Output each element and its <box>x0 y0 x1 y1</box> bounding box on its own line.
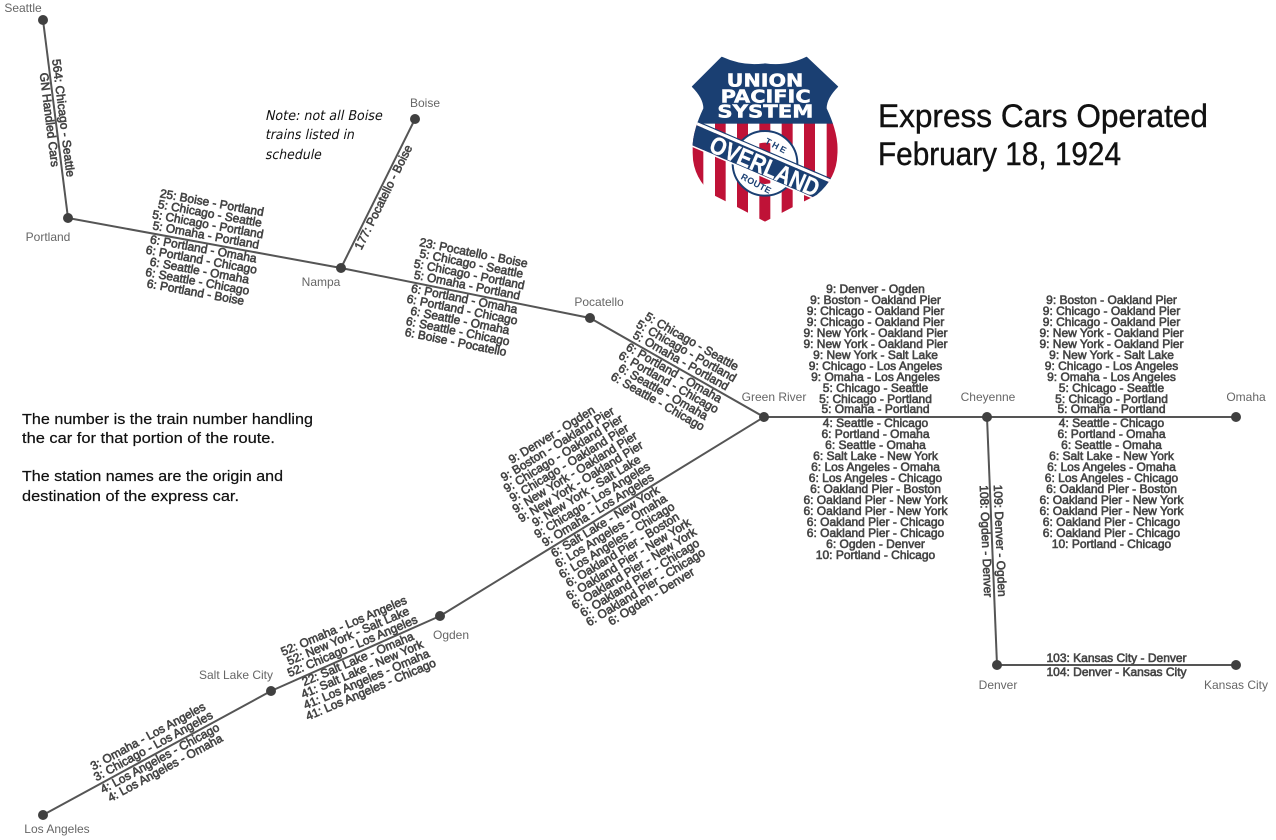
train labels: Cheyenne to Omaha: 9: Boston - Oakland Pier <box>1046 293 1177 307</box>
logo: The Route lettering <box>739 136 788 196</box>
note about Boise trains <box>264 108 385 163</box>
logo: Union Pacific shield: PACIFIC <box>721 86 811 107</box>
train labels: Green River to Ogden: 6: Los Angeles - Chicago <box>556 499 677 581</box>
train labels: Green River to Cheyenne: 9: New York - Oakland Pier <box>803 326 948 340</box>
train labels: Cheyenne to Omaha: 4: Seattle - Chicago <box>1059 416 1165 430</box>
train labels: Nampa to Pocatello <box>399 235 531 360</box>
train labels: Nampa to Pocatello: 6: Portland - Omaha <box>410 281 519 316</box>
station names: Kansas City <box>1204 678 1268 692</box>
train labels: Salt Lake City to Los Angeles: 3: Chicago - Los Angeles <box>91 708 215 784</box>
logo: Union Pacific shield: SYSTEM <box>717 101 813 122</box>
train labels: Green River to Cheyenne: 6: Oakland Pier - Boston <box>810 482 941 496</box>
train labels: Cheyenne to Omaha: 9: Chicago - Oakland Pier <box>1043 304 1180 318</box>
train labels: Cheyenne to Omaha: 9: Chicago - Los Angeles <box>1045 359 1178 373</box>
train labels: Green River to Cheyenne: 6: Oakland Pier - New York <box>803 493 949 507</box>
train labels: Ogden to Salt Lake City: 41: Salt Lake - New York <box>299 637 426 701</box>
train labels: Cheyenne to Denver: 109: Denver - Ogden <box>991 484 1009 597</box>
train labels: Portland to Nampa: 25: Boise - Portland <box>159 186 265 219</box>
train labels: Green River to Cheyenne: 6: Ogden - Denver <box>826 537 925 551</box>
station names: Green River <box>742 390 806 404</box>
train labels: Nampa to Pocatello: 6: Boise - Pocatello <box>404 325 508 359</box>
train labels: Cheyenne to Omaha: 9: Chicago - Oakland Pier <box>1043 315 1180 329</box>
train labels: Cheyenne to Omaha: 9: New York - Oakland Pier <box>1039 326 1184 340</box>
train labels: Portland to Nampa: 6: Portland - Chicago <box>145 243 258 277</box>
train labels: Green River to Ogden: 6: Salt Lake - New York <box>548 482 663 560</box>
train labels: Cheyenne to Omaha: 5: Chicago - Portland <box>1055 392 1168 406</box>
train labels: Salt Lake City to Los Angeles <box>86 698 227 806</box>
train labels: Cheyenne to Omaha <box>1039 293 1185 551</box>
note about Boise trains: trains listed in <box>264 127 357 143</box>
train labels: Cheyenne to Omaha: 9: New York - Oakland Pier <box>1039 337 1184 351</box>
train labels: Cheyenne to Omaha: 6: Salt Lake - New York <box>1049 449 1175 463</box>
station names: Nampa <box>302 275 341 289</box>
train labels: Green River to Cheyenne: 6: Seattle - Omaha <box>825 438 926 452</box>
train labels: Salt Lake City to Los Angeles: 3: Omaha - Los Angeles <box>88 699 208 773</box>
train labels: Pocatello to Green River <box>605 307 745 435</box>
train labels: Green River to Cheyenne: 6: Oakland Pier - Chicago <box>807 526 945 540</box>
title: February 18, 1924 <box>878 136 1121 172</box>
train labels: Cheyenne to Omaha: 6: Oakland Pier - Boston <box>1046 482 1177 496</box>
explanatory text: the car for that portion of the route. <box>22 430 275 447</box>
train labels: Ogden to Salt Lake City: 41: Los Angeles - Chicago <box>304 655 438 723</box>
station names: Salt Lake City <box>199 668 273 682</box>
train labels: Ogden to Salt Lake City: 52: New York - Salt Lake <box>285 604 412 668</box>
explanatory text: The station names are the origin and <box>22 468 283 485</box>
train labels: Nampa to Pocatello: 6: Seattle - Omaha <box>409 304 511 337</box>
explanatory text <box>22 411 313 505</box>
logo: Union Pacific shield: UNION <box>727 71 803 92</box>
train labels: Nampa to Pocatello: 6: Seattle - Chicago <box>405 314 511 349</box>
train labels: Nampa to Pocatello: 6: Portland - Chicago <box>406 292 519 328</box>
train labels: Green River to Cheyenne: 9: Boston - Oakland Pier <box>810 293 941 307</box>
title <box>878 98 1208 172</box>
train labels: Portland to Nampa: 5: Chicago - Seattle <box>157 197 263 230</box>
train labels: Pocatello to Green River: 6: Seattle - Chicago <box>608 369 707 434</box>
train labels: Green River to Cheyenne: 5: Chicago - Seattle <box>823 381 929 395</box>
train labels: Green River to Ogden: 6: Oakland Pier - Chicago <box>578 536 702 620</box>
station names: Portland <box>26 230 70 244</box>
train labels: Green River to Ogden: 9: Boston - Oakland Pier <box>498 404 617 484</box>
train labels: Green River to Ogden: 6: Oakland Pier - Boston <box>563 510 682 590</box>
train labels: Green River to Cheyenne: 6: Portland - Omaha <box>821 427 930 441</box>
train labels: Portland to Nampa: 6: Seattle - Omaha <box>149 255 251 287</box>
train labels: Green River to Cheyenne: 9: New York - Oakland Pier <box>803 337 948 351</box>
station names: Boise <box>410 96 440 110</box>
train labels: Cheyenne to Omaha: 6: Oakland Pier - New York <box>1039 504 1185 518</box>
train labels: Denver to Kansas City <box>1046 651 1187 679</box>
train labels: Cheyenne to Omaha: 6: Oakland Pier - Chicago <box>1043 526 1181 540</box>
train labels: Green River to Cheyenne: 6: Oakland Pier - New York <box>803 504 949 518</box>
train labels: Portland to Nampa <box>139 186 269 309</box>
train labels: Cheyenne to Omaha: 9: New York - Salt Lake <box>1049 348 1174 362</box>
train labels: Cheyenne to Omaha: 6: Los Angeles - Omaha <box>1047 460 1176 474</box>
train labels: Green River to Ogden <box>487 391 717 640</box>
note about Boise trains: Note: not all Boise <box>264 108 385 124</box>
train labels: Denver to Kansas City: 103: Kansas City - Denver <box>1046 651 1187 665</box>
train labels: Green River to Ogden: 9: Denver - Ogden <box>506 403 597 467</box>
train labels: Green River to Cheyenne <box>803 282 949 562</box>
train labels: Portland to Nampa: 6: Portland - Boise <box>146 276 246 308</box>
train labels: Cheyenne to Omaha: 6: Oakland Pier - Chicago <box>1043 515 1181 529</box>
logo: Overland band lettering: OVERLAND <box>705 132 823 203</box>
train labels: Green River to Ogden: 9: Omaha - Los Angeles <box>539 470 656 549</box>
station names: Cheyenne <box>961 390 1016 404</box>
train labels: Cheyenne to Denver: 108: Ogden - Denver <box>977 485 995 598</box>
train labels: Green River to Cheyenne: 6: Oakland Pier - Chicago <box>807 515 945 529</box>
train labels: Pocatello to Green River: 6: Seattle - Omaha <box>616 361 711 423</box>
station names: Omaha <box>1226 390 1266 404</box>
train labels: Portland to Nampa: 5: Chicago - Portland <box>151 207 265 241</box>
train labels: Salt Lake City to Los Angeles: 4: Los Angeles - Omaha <box>105 731 225 805</box>
train labels: Green River to Ogden: 9: Chicago - Oakland Pier <box>507 421 631 505</box>
train labels: Nampa to Pocatello: 5: Chicago - Seattle <box>418 246 525 281</box>
train labels: Green River to Ogden: 9: New York - Oakland Pier <box>515 438 646 525</box>
train labels: Cheyenne to Omaha: 6: Portland - Omaha <box>1057 427 1166 441</box>
station names: Pocatello <box>574 295 624 309</box>
train labels: Green River to Cheyenne: 5: Chicago - Portland <box>819 392 932 406</box>
train labels: Green River to Cheyenne: 5: Omaha - Portland <box>821 402 930 416</box>
train labels: Cheyenne to Denver <box>977 484 1009 598</box>
train labels: Nampa to Pocatello: 5: Chicago - Portland <box>413 256 526 292</box>
train labels: Green River to Ogden: 9: Chicago - Oakland Pier <box>501 412 625 495</box>
train labels: Portland to Nampa: 6: Seattle - Chicago <box>144 265 251 298</box>
train labels: Nampa to Pocatello: 5: Omaha - Portland <box>413 268 521 303</box>
train labels: Salt Lake City to Los Angeles: 4: Los Angeles - Chicago <box>98 720 222 796</box>
station names: Seattle <box>4 1 42 15</box>
train labels: Pocatello to Green River: 5: Chicago - Portland <box>634 317 739 385</box>
train labels: Green River to Cheyenne: 6: Los Angeles - Omaha <box>811 460 940 474</box>
explanatory text: The number is the train number handling <box>22 411 313 428</box>
train labels: Cheyenne to Omaha: 6: Oakland Pier - New York <box>1039 493 1185 507</box>
train labels: Green River to Cheyenne: 9: Chicago - Oakland Pier <box>807 315 944 329</box>
station names: Denver <box>979 678 1017 692</box>
train labels: Green River to Ogden: 6: Los Angeles - Omaha <box>552 491 670 571</box>
train labels: Green River to Cheyenne: 9: New York - Salt Lake <box>813 348 938 362</box>
train labels: Cheyenne to Omaha: 5: Chicago - Seattle <box>1059 381 1165 395</box>
train labels: Green River to Cheyenne: 9: Omaha - Los Angeles <box>811 370 940 384</box>
train labels: Portland to Nampa: 6: Portland - Omaha <box>149 232 258 266</box>
train labels: Cheyenne to Omaha: 6: Los Angeles - Chicago <box>1045 471 1179 485</box>
train labels: Ogden to Salt Lake City: 52: Omaha - Los Angeles <box>279 593 409 659</box>
train labels: Ogden to Salt Lake City: 52: Chicago - Los Angeles <box>285 612 420 680</box>
train labels: Green River to Cheyenne: 9: Chicago - Los Angeles <box>809 359 942 373</box>
note about Boise trains: schedule <box>264 147 324 163</box>
train labels: Green River to Cheyenne: 6: Salt Lake - New York <box>813 449 939 463</box>
train labels: Green River to Ogden: 6: Oakland Pier - New York <box>569 524 700 612</box>
train labels: Green River to Ogden: 9: New York - Salt Lake <box>529 452 643 530</box>
train labels: Nampa to Pocatello: 23: Pocatello - Boise <box>418 235 529 271</box>
train labels: Green River to Cheyenne: 10: Portland - Chicago <box>816 548 936 562</box>
train labels: Seattle to Portland: 564: Chicago - Seattle <box>49 58 78 178</box>
train labels: Green River to Ogden: 6: Oakland Pier - Chicago <box>583 545 708 629</box>
train labels: Cheyenne to Omaha: 10: Portland - Chicago <box>1052 537 1172 551</box>
train labels: Green River to Cheyenne: 6: Los Angeles - Chicago <box>809 471 943 485</box>
train labels: Green River to Cheyenne: 9: Chicago - Oakland Pier <box>807 304 944 318</box>
train labels: Pocatello to Green River: 5: Omaha - Portland <box>631 328 731 393</box>
train labels: Ogden to Salt Lake City: 22: Salt Lake - Omaha <box>300 629 416 689</box>
logo: The Route lettering: ROUTE <box>739 172 773 196</box>
train labels: Cheyenne to Omaha: 9: Omaha - Los Angeles <box>1047 370 1176 384</box>
train labels: Pocatello to Green River: 5: Chicago - Seattle <box>643 309 741 374</box>
train labels: Green River to Cheyenne: 9: Denver - Ogden <box>826 282 925 296</box>
station names: Los Angeles <box>24 822 90 836</box>
train labels: Cheyenne to Omaha: 6: Seattle - Omaha <box>1061 438 1162 452</box>
train labels: Green River to Ogden: 9: New York - Oakland Pier <box>510 429 640 516</box>
station names: Ogden <box>433 628 469 642</box>
logo: The Route lettering: THE <box>763 136 788 155</box>
train labels: Ogden to Salt Lake City <box>277 592 438 723</box>
train labels: Green River to Ogden: 6: Oakland Pier - New York <box>563 515 694 603</box>
train labels: Green River to Ogden: 6: Ogden - Denver <box>606 565 697 628</box>
train labels: Green River to Cheyenne: 4: Seattle - Chicago <box>823 416 929 430</box>
title: Express Cars Operated <box>878 98 1208 134</box>
explanatory text: destination of the express car. <box>22 488 239 505</box>
train labels: Denver to Kansas City: 104: Denver - Kansas City <box>1046 665 1187 679</box>
train labels: Portland to Nampa: 5: Omaha - Portland <box>152 218 260 252</box>
train labels: Seattle to Portland <box>35 58 78 180</box>
train labels: Pocatello to Green River: 6: Portland - Chicago <box>616 348 721 416</box>
train labels: Green River to Ogden: 9: Chicago - Los Angeles <box>532 459 653 541</box>
logo: Union Pacific shield <box>692 56 838 222</box>
train labels: Cheyenne to Omaha: 5: Omaha - Portland <box>1057 402 1166 416</box>
train labels: Seattle to Portland: GN Handled Cars <box>37 72 62 168</box>
train labels: Pocatello to Green River: 6: Portland - Omaha <box>624 340 725 406</box>
train labels: Ogden to Salt Lake City: 41: Los Angeles - Omaha <box>301 646 432 712</box>
train label: Nampa to Boise: 177: Pocatello - Boise <box>352 142 415 252</box>
